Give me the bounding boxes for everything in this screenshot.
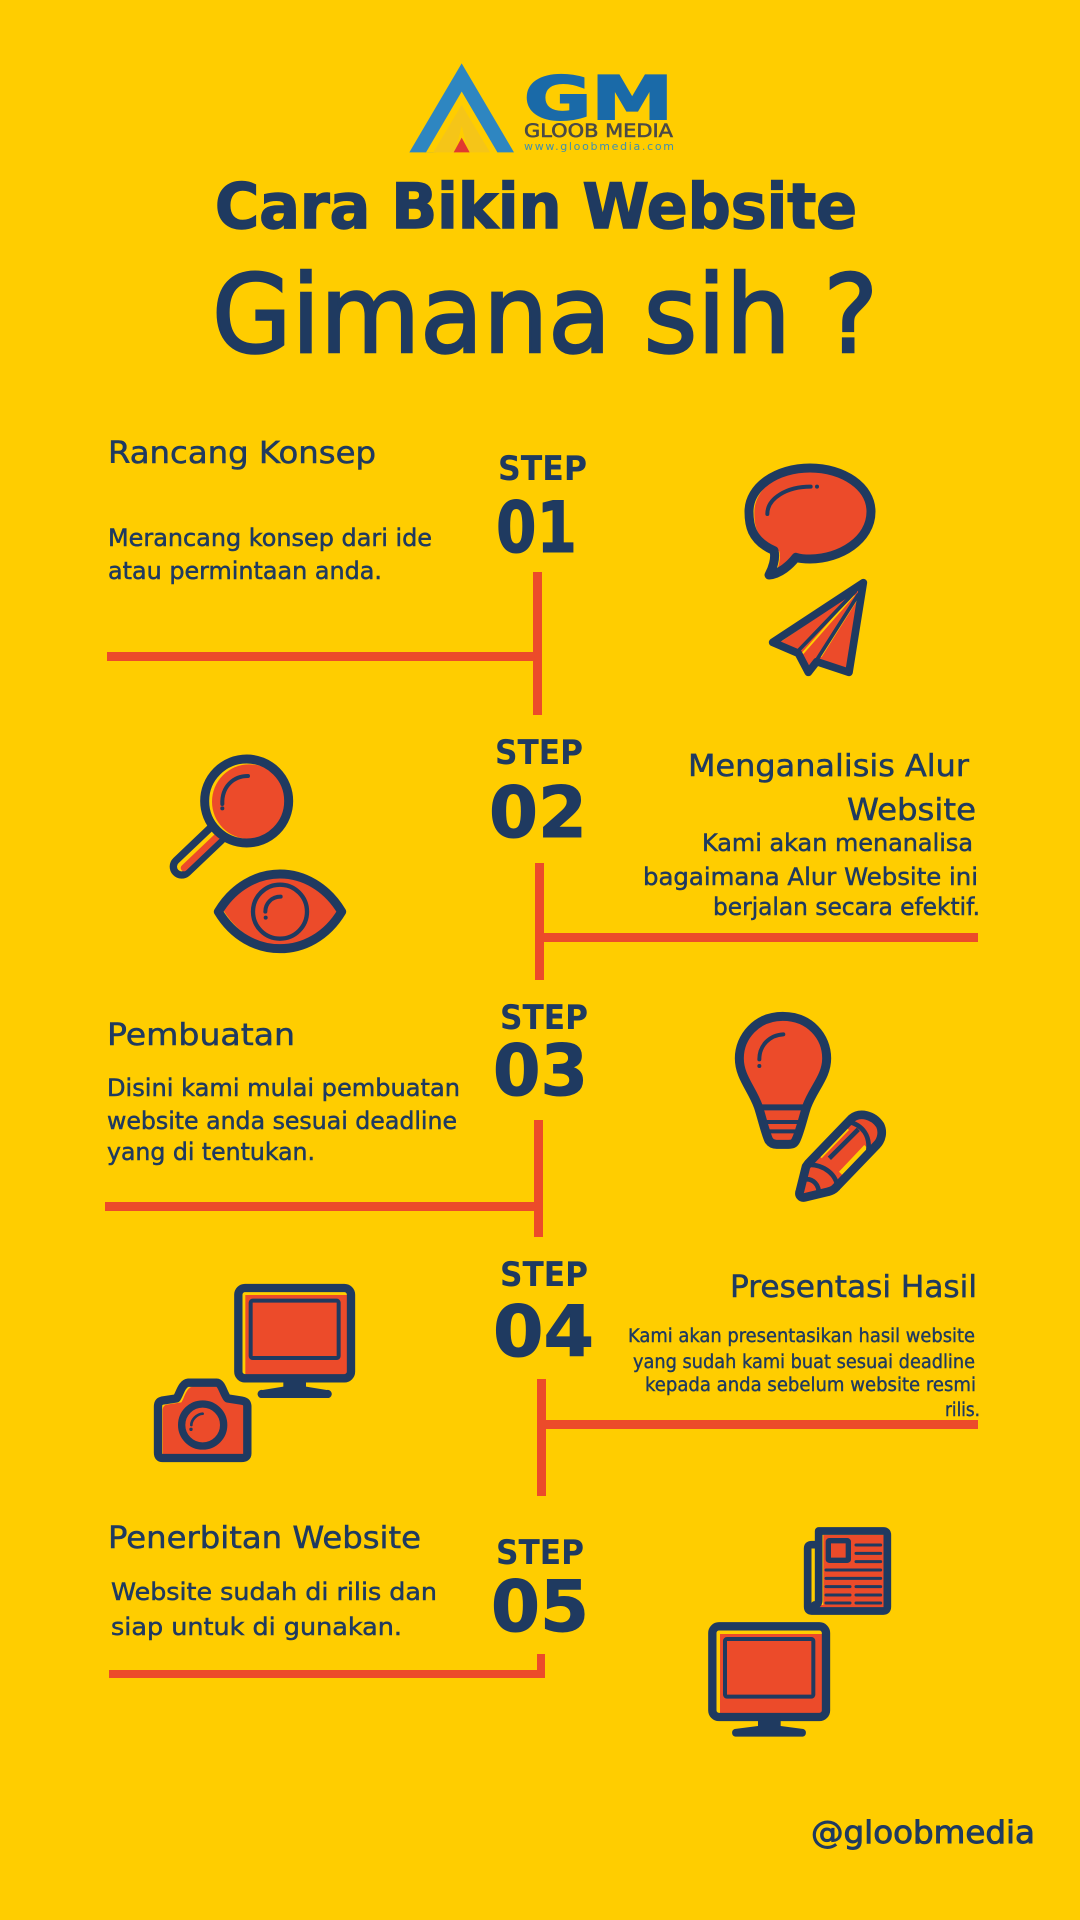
step 4 badge: 04 (493, 1291, 594, 1373)
step 4 description: rilis. (945, 1400, 980, 1421)
step 4 badge (493, 1255, 594, 1373)
step 2 description: bagaimana Alur Website ini (643, 863, 978, 891)
step 1 connector (107, 572, 542, 715)
step 1 badge (496, 449, 587, 569)
icon: newspaper (808, 1531, 887, 1611)
icon: speech bubble (749, 468, 876, 576)
step 3 badge: STEP (500, 998, 588, 1038)
step 2 badge: 02 (489, 772, 587, 854)
step 1 badge: STEP (498, 449, 587, 489)
logo: Gloob Media (409, 63, 674, 153)
title line 1: Cara Bikin Website (215, 170, 857, 243)
step 4 connector (537, 1379, 978, 1496)
logo url: www.gloobmedia.com (524, 140, 674, 153)
step 1 description: atau permintaan anda. (108, 557, 382, 585)
step 5 badge: 05 (491, 1566, 589, 1648)
step 1 badge: 01 (496, 487, 577, 569)
step 5 badge: STEP (496, 1533, 584, 1573)
step 2 description (643, 829, 980, 921)
step 4 description: Kami akan presentasikan hasil website (628, 1326, 975, 1347)
step 4 badge: STEP (500, 1255, 588, 1295)
step 4 description: kepada anda sebelum website resmi (645, 1375, 976, 1396)
title (212, 170, 878, 378)
icon: light bulb (739, 1016, 831, 1144)
step 3 description: website anda sesuai deadline (107, 1107, 457, 1135)
logo mark (409, 63, 514, 152)
step 3 description: yang di tentukan. (107, 1138, 315, 1166)
step 3 badge: 03 (493, 1030, 588, 1112)
step 5 (108, 1521, 887, 1737)
step 4 (158, 1255, 980, 1496)
step 3 connector (105, 1120, 543, 1237)
logo wordmark: GM (524, 64, 673, 134)
step 5 description: Website sudah di rilis dan (111, 1578, 437, 1606)
step 5 description (111, 1578, 437, 1641)
icon: magnifier (182, 759, 289, 868)
step 2 (182, 733, 980, 980)
step 5 description: siap untuk di gunakan. (111, 1613, 402, 1641)
step 3 heading: Pembuatan (107, 1018, 295, 1053)
step 4 description (628, 1326, 980, 1421)
step 2 heading (688, 749, 976, 828)
step 4 description: yang sudah kami buat sesuai deadline (633, 1352, 975, 1373)
icon: monitor small (238, 1288, 351, 1398)
step 2 badge: STEP (495, 733, 583, 773)
step 3 description (107, 1074, 460, 1166)
social handle: @gloobmedia (811, 1815, 1035, 1851)
icon: eye (218, 872, 346, 949)
step 1 description: Merancang konsep dari ide (108, 524, 432, 552)
icon: camera (158, 1383, 252, 1462)
step 1 (107, 436, 876, 715)
step 2 heading: Menganalisis Alur (688, 749, 970, 784)
logo name: GLOOB MEDIA (524, 120, 673, 142)
step 5 heading: Penerbitan Website (108, 1521, 421, 1556)
step 1 description (108, 524, 432, 585)
step 2 badge (489, 733, 587, 854)
step 2 description: Kami akan menanalisa (702, 829, 973, 857)
step 4 heading: Presentasi Hasil (730, 1270, 977, 1305)
step 5 connector (109, 1654, 545, 1678)
title line 2: Gimana sih ? (212, 253, 878, 378)
step 2 heading: Website (847, 793, 976, 828)
icon: monitor large (712, 1626, 826, 1737)
step 2 description: berjalan secara efektif. (713, 893, 980, 921)
step 1 heading: Rancang Konsep (108, 436, 376, 471)
step 2 connector (535, 863, 978, 980)
icon: paper plane (773, 583, 863, 672)
step 3 (105, 998, 884, 1237)
icon: pencil (799, 1115, 884, 1200)
step 3 description: Disini kami mulai pembuatan (107, 1074, 460, 1102)
